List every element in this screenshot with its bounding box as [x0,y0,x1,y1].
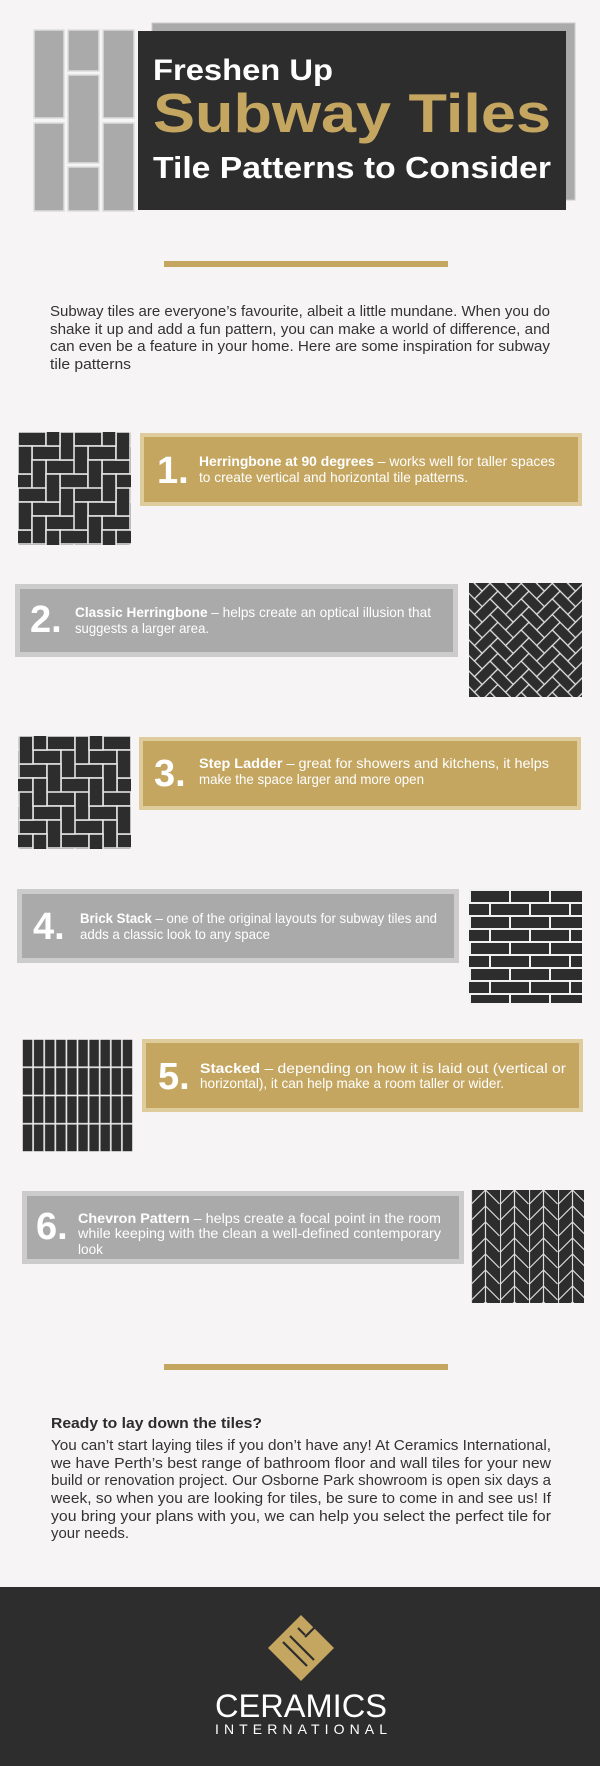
intro paragraph: shake it up and add a fun pattern, you can make a world of difference, and [50,321,550,338]
panel 3: 3. [154,753,186,795]
title line 3: Tile Patterns to Consider [153,150,551,185]
panel 6: look [78,1241,104,1257]
icon: step ladder tiles [18,736,131,849]
icon: classic herringbone tiles [469,583,582,697]
panel 1: 1. [157,450,189,492]
panel 5: Stacked – depending on how it is laid out (vertical or [200,1060,566,1076]
footer [0,1587,600,1766]
panel 2: suggests a larger area. [75,620,209,636]
intro paragraph: Subway tiles are everyone’s favourite, albeit a little mundane. When you do [50,303,550,320]
panel 5: 5. [158,1056,190,1098]
item 6 [22,1190,584,1303]
panel 4 [17,889,459,963]
closing paragraph: we have Perth’s best range of bathroom floor and wall tiles for your new [50,1455,551,1472]
closing paragraph: build or renovation project. Our Osborne Park showroom is open six days a [51,1472,552,1489]
panel 4: adds a classic look to any space [80,926,270,942]
intro paragraph: tile patterns [50,356,131,373]
panel 4: 4. [33,906,65,948]
closing heading: Ready to lay down the tiles? [51,1415,262,1432]
closing paragraph [50,1437,552,1542]
panel 2 [15,584,458,657]
icon: brick tiles [469,889,582,1003]
panel 5 [142,1039,583,1112]
panel 4: Brick Stack – one of the original layouts for subway tiles and [80,910,437,926]
title line 2: Subway Tiles [153,82,551,144]
intro paragraph: can even be a feature in your home. Here are some inspiration for subway [50,338,550,355]
item 1 [18,432,582,545]
logo wordmark: CERAMICS [215,1688,387,1724]
logo mark [268,1615,334,1681]
panel 1: to create vertical and horizontal tile patterns. [199,469,468,485]
title line 1: Freshen Up [153,54,333,87]
closing section [50,1415,552,1542]
closing paragraph: you bring your plans with you, we can help you select the perfect tile for [51,1508,551,1525]
panel 1: Herringbone at 90 degrees – works well for taller spaces [199,453,555,469]
closing paragraph: week, so when you are looking for tiles, be sure to come in and see us! If [50,1490,552,1507]
panel 2: Classic Herringbone – helps create an optical illusion that [75,604,431,620]
panel 6: 6. [36,1206,68,1248]
item 4 [17,889,582,1003]
footer: INTERNATIONAL [215,1721,387,1737]
panel 6: Chevron Pattern – helps create a focal point in the room [78,1210,441,1226]
panel 3: make the space larger and more open [199,771,424,787]
panel 2: 2. [30,599,62,641]
header: tile icon block [34,30,134,211]
closing paragraph: your needs. [51,1525,129,1542]
icon: chevron tiles [471,1190,584,1303]
panel 3 [139,737,581,810]
icon: herringbone 90 tiles [18,432,131,545]
item 5 [22,1039,583,1152]
panel 3: Step Ladder – great for showers and kitchens, it helps [199,755,549,771]
intro paragraph [50,303,550,373]
panel 5: horizontal), it can help make a room taller or wider. [200,1075,504,1091]
closing paragraph: You can’t start laying tiles if you don’t have any! At Ceramics International, [51,1437,551,1454]
header: title panel [138,23,575,210]
icon: stacked tiles [22,1039,133,1152]
item 2 [15,583,582,697]
panel 1 [140,433,582,506]
panel 6: while keeping with the clean a well-defined contemporary [77,1225,441,1241]
panel 6 [22,1191,464,1264]
item 3 [18,736,581,849]
